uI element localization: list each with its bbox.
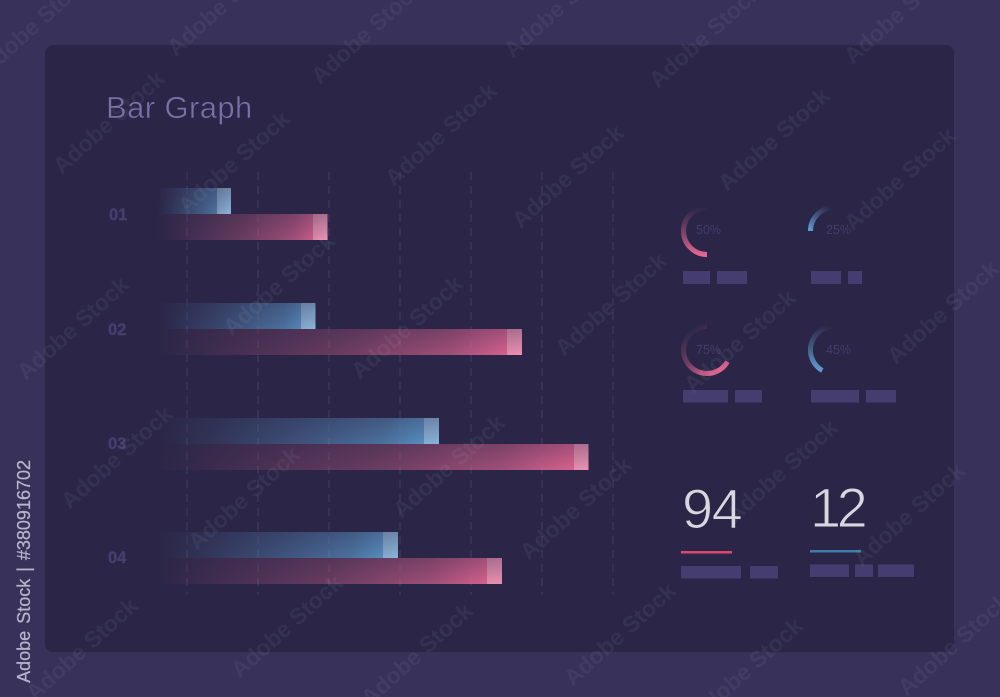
stat: 94: 94: [682, 477, 742, 540]
donut: 25%: 25%: [826, 223, 851, 237]
bar group 04: [158, 532, 502, 584]
watermarks: Adobe Stock: [679, 284, 801, 398]
watermarks: Adobe Stock: [12, 271, 134, 385]
placeholder bars: [810, 564, 914, 577]
watermarks: Adobe Stock: [48, 65, 170, 179]
donut: 50%: 50%: [696, 223, 721, 237]
row labels: 02: [108, 321, 126, 339]
donut: 45%: [810, 326, 896, 402]
row labels: [108, 206, 127, 567]
stat: 12: 12: [810, 476, 866, 539]
placeholder bars: [681, 566, 778, 578]
row labels: 03: [108, 435, 126, 453]
watermarks: Adobe Stock: [839, 122, 961, 236]
title: Bar Graph: [106, 90, 253, 125]
stat: 94: [681, 477, 778, 578]
row labels: 01: [109, 206, 127, 224]
placeholder bars: [683, 271, 747, 284]
placeholder bars: [811, 390, 896, 402]
watermarks: Adobe Stock: [507, 119, 629, 233]
watermarks: Adobe Stock: [515, 451, 637, 565]
donut: 45%: 45%: [826, 343, 851, 357]
watermarks: Adobe Stock: [226, 569, 348, 683]
watermarks: Adobe Stock: [713, 82, 835, 196]
watermarks: Adobe Stock: [218, 227, 340, 341]
donut: 75%: [683, 326, 762, 402]
watermarks: Adobe Stock: [183, 441, 305, 555]
grid lines: [187, 172, 613, 595]
bar group 01: [158, 188, 328, 240]
bar chart: [158, 172, 613, 595]
watermarks: Adobe Stock: [388, 409, 510, 523]
watermarks: Adobe Stock: [559, 577, 681, 691]
placeholder bars: [811, 271, 862, 284]
row labels: 04: [108, 549, 127, 567]
placeholder bars: [683, 390, 762, 402]
stock id text: Adobe Stock | #380916702: [14, 460, 34, 683]
bar group 03: [158, 418, 588, 470]
watermarks: Adobe Stock: [550, 247, 672, 361]
donut: 75%: 75%: [696, 343, 721, 357]
watermarks: Adobe Stock: [380, 77, 502, 191]
donut: 50%: [683, 208, 747, 284]
watermarks: Adobe Stock: [848, 457, 970, 571]
main panel: [45, 45, 954, 652]
watermarks: Adobe Stock: [721, 414, 843, 528]
watermarks: Adobe Stock: [173, 105, 295, 219]
stat: 12: [810, 476, 914, 577]
bar group 02: [158, 303, 522, 355]
watermarks: Adobe Stock: [56, 400, 178, 514]
watermarks: Adobe Stock: [346, 270, 468, 384]
donut: 25%: [810, 208, 862, 284]
watermarks: Adobe Stock: [882, 255, 1000, 369]
